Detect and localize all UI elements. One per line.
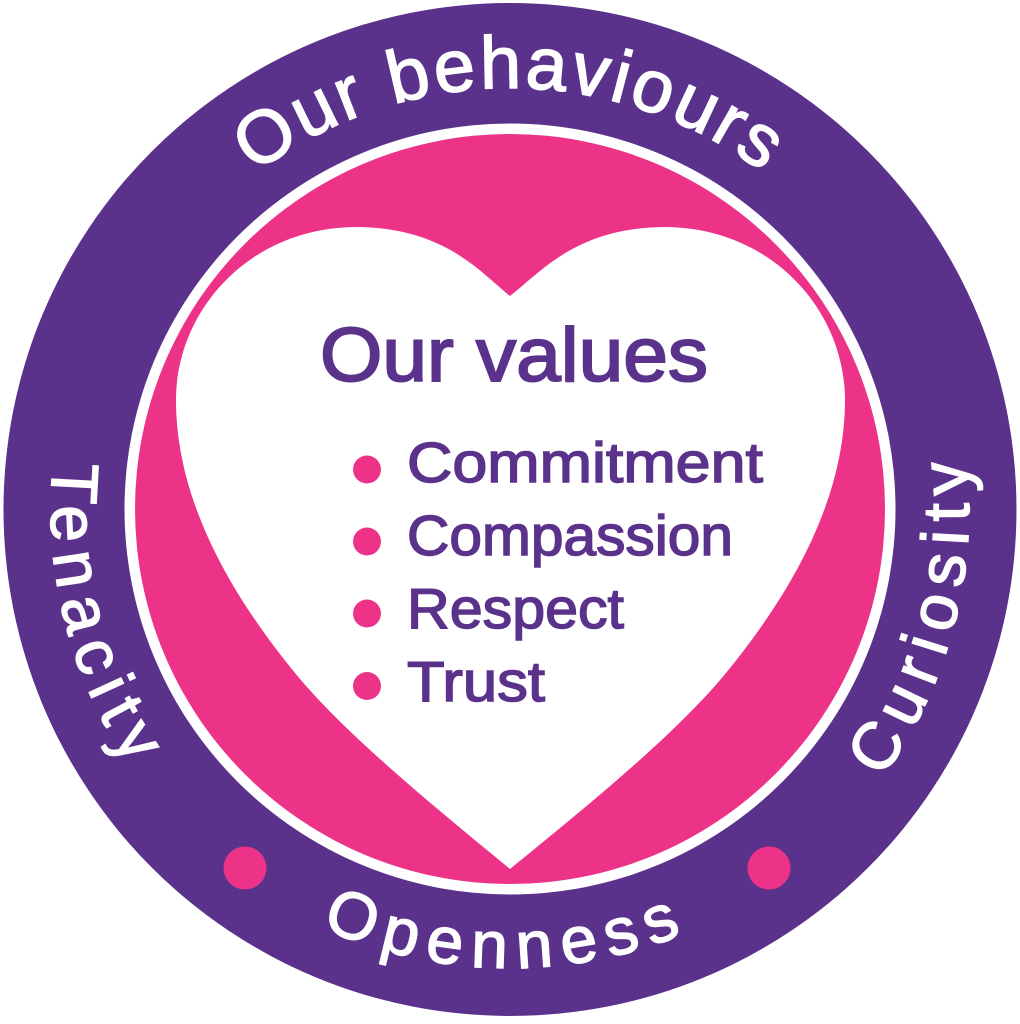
dot: right ring separator xyxy=(748,846,790,890)
label: openness: Openness xyxy=(329,892,678,969)
white ring xyxy=(124,124,896,894)
heading: our values: Our values xyxy=(320,313,708,398)
value: trust xyxy=(353,650,545,714)
value: commitment: Commitment xyxy=(407,431,763,495)
heading: our behaviours: Our behaviours xyxy=(237,34,779,167)
value: trust: Trust xyxy=(407,650,545,714)
label: curiosity: Curiosity xyxy=(852,462,984,770)
value: respect: Respect xyxy=(407,577,624,641)
white heart xyxy=(176,227,845,869)
label: tenacity: Tenacity xyxy=(50,465,160,756)
dot: left ring separator xyxy=(224,846,266,890)
values list xyxy=(353,431,763,714)
value: compassion: Compassion xyxy=(407,504,733,568)
pink circle xyxy=(135,134,885,884)
